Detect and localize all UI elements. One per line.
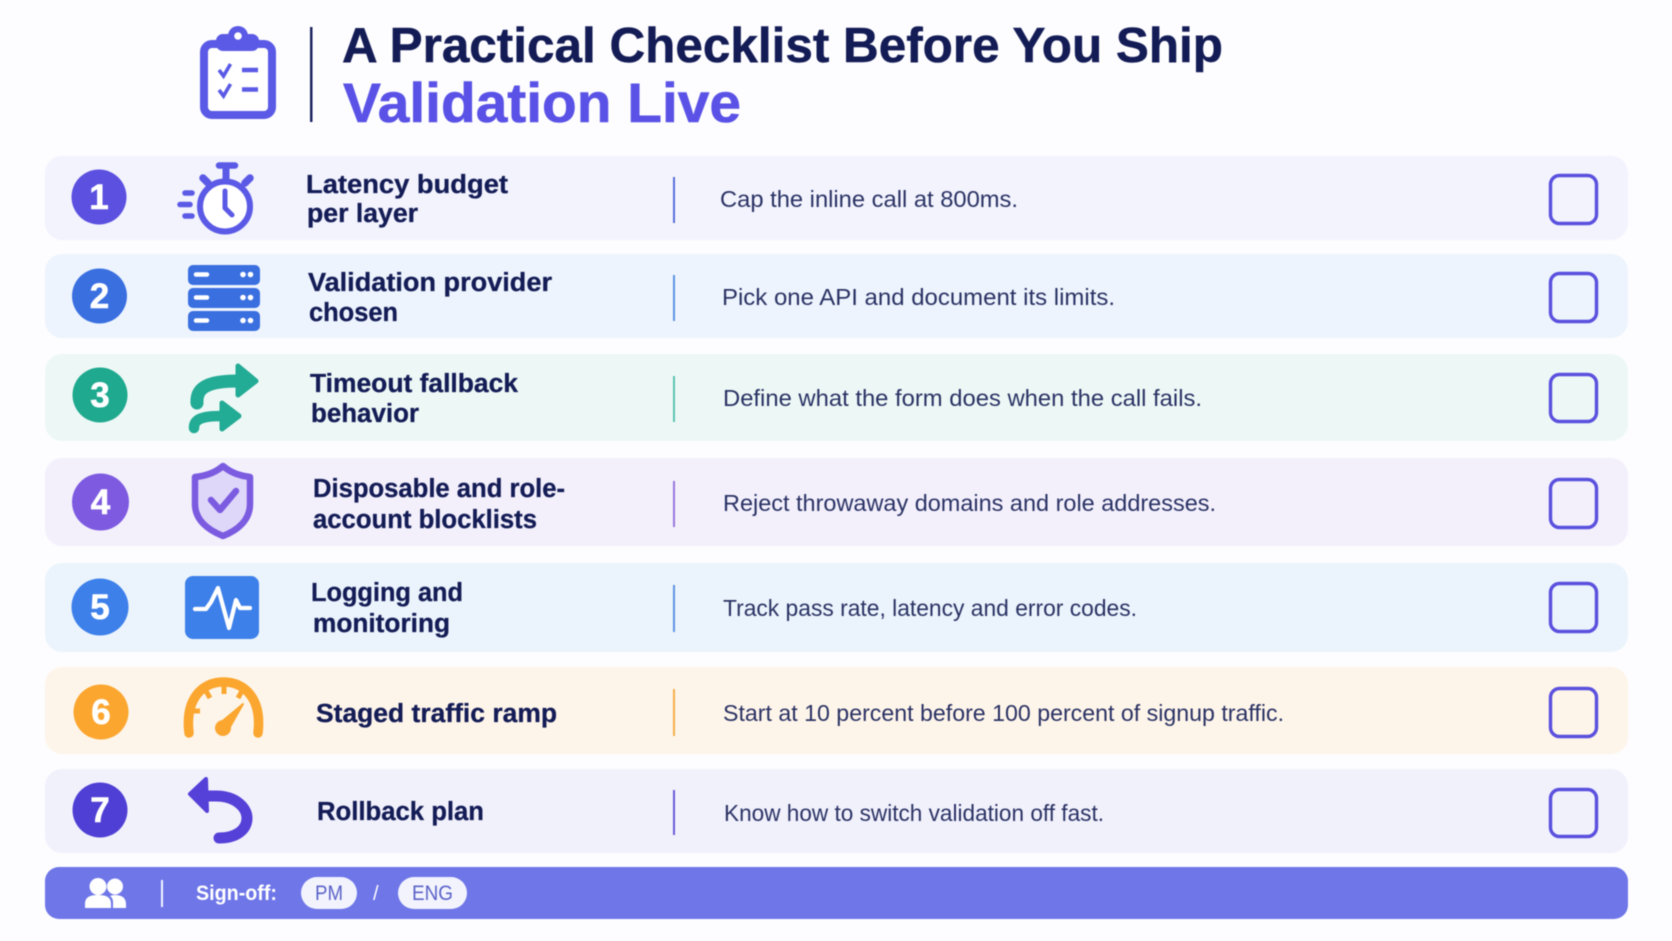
item 7 description: Know how to switch validation off fast. bbox=[724, 800, 1104, 826]
item 3 title bbox=[310, 370, 519, 428]
item 6 divider bbox=[673, 689, 675, 736]
panel: item 5 logging and monitoring bbox=[45, 563, 1628, 652]
row background bbox=[45, 254, 1628, 338]
number badge 1 bbox=[72, 170, 126, 224]
title: A Practical Checklist Before You Ship bbox=[342, 19, 1223, 73]
item 6 description: Start at 10 percent before 100 percent of signup traffic. bbox=[723, 700, 1284, 726]
icon: fallback arrows bbox=[194, 366, 256, 429]
pill: ENG: ENG bbox=[412, 882, 453, 905]
number badge 5: 5 bbox=[90, 588, 110, 627]
row background bbox=[45, 156, 1628, 240]
item 7 title: Rollback plan bbox=[317, 798, 484, 826]
item 5 title: Logging and bbox=[311, 579, 463, 607]
number badge 6 bbox=[74, 684, 128, 740]
item 4 description: Reject throwaway domains and role addresses. bbox=[723, 490, 1216, 516]
item 4 title: Disposable and role- bbox=[313, 475, 565, 503]
item 4 title bbox=[313, 475, 565, 534]
icon: clipboard checklist bbox=[204, 26, 272, 115]
pill: PM: PM bbox=[315, 882, 343, 905]
panel: item 2 validation provider bbox=[45, 254, 1628, 338]
checkbox 4 bbox=[1550, 480, 1596, 528]
item 1 divider bbox=[673, 177, 675, 223]
number badge 7: 7 bbox=[90, 791, 110, 830]
pill: PM bbox=[301, 877, 357, 909]
panel: item 6 staged traffic ramp bbox=[45, 667, 1628, 754]
item 4 divider bbox=[673, 481, 675, 527]
icon: server stack bbox=[188, 265, 260, 331]
item 1 title: per layer bbox=[307, 200, 418, 228]
number badge 2: 2 bbox=[90, 277, 109, 316]
item 5 title: monitoring bbox=[313, 610, 450, 638]
subtitle: Validation Live bbox=[343, 71, 741, 134]
panel: item 4 blocklists bbox=[45, 458, 1628, 546]
icon: shield check bbox=[195, 466, 250, 536]
item 3 title: Timeout fallback bbox=[310, 370, 519, 398]
number badge 5 bbox=[72, 578, 128, 636]
item 6 title: Staged traffic ramp bbox=[316, 700, 557, 728]
item 2 divider bbox=[673, 275, 675, 321]
number badge 7 bbox=[72, 782, 128, 838]
item 4 title: account blocklists bbox=[313, 506, 537, 534]
checkbox 3 bbox=[1550, 374, 1596, 422]
item 5 title bbox=[311, 579, 463, 638]
checkbox 5 bbox=[1550, 584, 1596, 632]
number badge 4: 4 bbox=[91, 483, 111, 522]
checkbox 1 bbox=[1550, 176, 1596, 224]
item 7 divider bbox=[673, 790, 675, 835]
icon: speed gauge bbox=[188, 682, 259, 736]
sign-off label: Sign-off: bbox=[196, 882, 277, 905]
item 1 title bbox=[306, 171, 509, 228]
slash separator: / bbox=[373, 883, 379, 905]
number badge 3 bbox=[72, 368, 128, 422]
row background bbox=[45, 769, 1628, 853]
item 1 title: Latency budget bbox=[306, 171, 509, 199]
icon: activity pulse bbox=[185, 576, 259, 639]
item 2 title: Validation provider bbox=[308, 269, 552, 297]
number badge 4 bbox=[72, 474, 129, 530]
number badge 6: 6 bbox=[91, 693, 111, 732]
number badge 3: 3 bbox=[90, 376, 110, 415]
footer: sign-off bar bbox=[45, 867, 1628, 919]
checkbox 6 bbox=[1550, 688, 1596, 736]
item 2 title bbox=[308, 269, 552, 327]
panel: item 3 timeout fallback bbox=[45, 354, 1628, 441]
row background bbox=[45, 667, 1628, 754]
checkbox 2 bbox=[1550, 274, 1596, 322]
header divider bbox=[310, 27, 312, 122]
footer background bbox=[45, 867, 1628, 919]
item 3 title: behavior bbox=[311, 400, 419, 428]
item 3 description: Define what the form does when the call fails. bbox=[723, 385, 1202, 411]
row background bbox=[45, 354, 1628, 441]
number badge 2 bbox=[72, 268, 127, 324]
icon: stopwatch bbox=[180, 166, 250, 232]
row background bbox=[45, 563, 1628, 652]
icon: people bbox=[85, 878, 126, 908]
number badge 1: 1 bbox=[89, 178, 109, 217]
pill: ENG bbox=[398, 877, 467, 909]
item 5 divider bbox=[673, 585, 675, 632]
item 5 description: Track pass rate, latency and error codes. bbox=[723, 595, 1137, 621]
item 2 description: Pick one API and document its limits. bbox=[722, 284, 1115, 310]
panel: item 1 latency budget bbox=[45, 156, 1628, 240]
item 1 description: Cap the inline call at 800ms. bbox=[720, 186, 1018, 212]
row background bbox=[45, 458, 1628, 546]
header bbox=[204, 19, 1223, 134]
item 3 divider bbox=[673, 376, 675, 422]
footer divider bbox=[161, 880, 163, 907]
icon: rollback arrow bbox=[190, 779, 247, 838]
item 2 title: chosen bbox=[309, 299, 398, 327]
checkbox 7 bbox=[1550, 790, 1596, 836]
panel: item 7 rollback plan bbox=[45, 769, 1628, 853]
